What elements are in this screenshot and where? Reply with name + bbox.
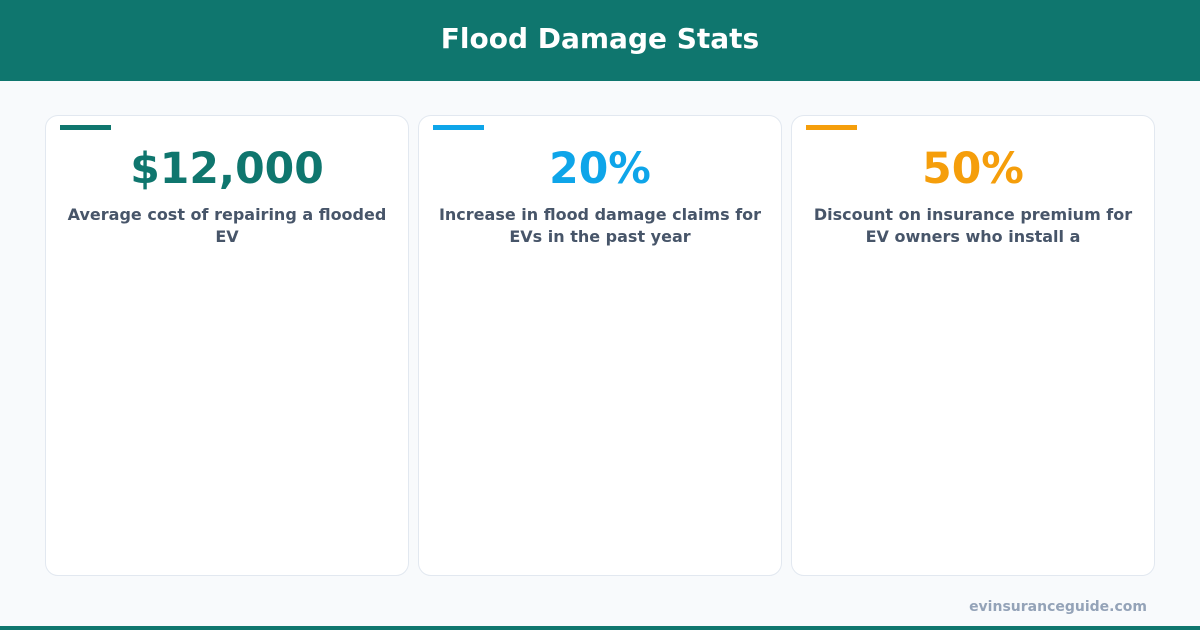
stat number: 20%: [549, 145, 651, 194]
title: [0, 0, 1200, 81]
stat description: Average cost of repairing a flooded EV: [68, 205, 386, 246]
panel: claims increase: [418, 115, 782, 576]
accent bar: [806, 125, 857, 130]
title: Flood Damage Stats: [441, 22, 759, 55]
bottom bar: [0, 626, 1200, 630]
stat description: Increase in flood damage claims for EVs in the past year: [439, 205, 761, 246]
stat number: 50%: [922, 145, 1024, 194]
accent bar: [60, 125, 111, 130]
footer source: evinsuranceguide.com: [969, 599, 1147, 615]
panel: discount: [791, 115, 1155, 576]
stat description: Discount on insurance premium for EV owners who install a: [814, 205, 1132, 246]
panel: repair cost: [45, 115, 409, 576]
stat number: $12,000: [130, 145, 324, 194]
accent bar: [433, 125, 484, 130]
